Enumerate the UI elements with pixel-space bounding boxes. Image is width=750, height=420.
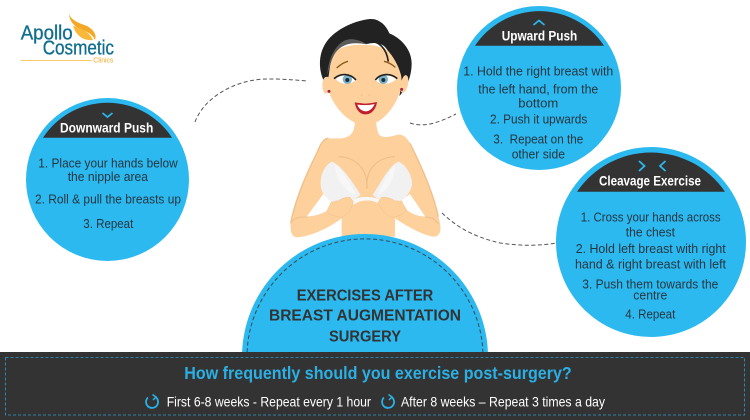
logo: Apollo Cosmetic Clinics: Apollo [21, 22, 73, 44]
logo flame icon [69, 13, 96, 40]
panel: upward push [457, 6, 621, 170]
steps: downward push: 1. Place your hands below [38, 157, 179, 171]
mouth [355, 102, 377, 114]
steps: cleavage exercise: 4. Repeat [625, 308, 676, 322]
header: upward push: Upward Push [502, 28, 577, 44]
steps: upward push: 1. Hold the right breast with [463, 65, 613, 79]
head [320, 19, 412, 125]
steps: downward push: 3. Repeat [83, 217, 134, 231]
steps: upward push: the left hand, from the [478, 83, 598, 97]
header: cleavage exercise [577, 153, 725, 192]
eyes and brows [334, 61, 397, 96]
earrings [327, 88, 403, 93]
steps: cleavage exercise: 2. Hold left breast with right [576, 242, 726, 256]
logo: Apollo Cosmetic Clinics: Cosmetic [43, 37, 114, 59]
footer bar [0, 352, 750, 420]
steps: downward push [35, 157, 181, 231]
icon: chevron down [102, 113, 112, 117]
panel: downward push [26, 98, 189, 261]
steps: upward push: 2. Push it upwards [490, 113, 587, 127]
header: upward push [475, 11, 604, 46]
steps: cleavage exercise: centre [633, 289, 667, 303]
steps: upward push: 3. Repeat on the [493, 133, 583, 147]
body [291, 117, 441, 237]
footer question: How frequently should you exercise post-surgery? [184, 363, 572, 383]
hair [320, 19, 412, 96]
icon: repeat arrow 2 [382, 394, 394, 408]
ears [322, 74, 410, 94]
steps: cleavage exercise [575, 211, 727, 322]
header: cleavage exercise: Cleavage Exercise [599, 174, 701, 189]
steps: upward push: bottom [518, 97, 558, 111]
panel: main title semicircle [242, 234, 488, 352]
panel: cleavage exercise [556, 147, 746, 337]
title: BREAST AUGMENTATION [269, 308, 461, 325]
dashed connector: upward push [410, 114, 456, 125]
title: SURGERY [329, 329, 401, 346]
dashed connector: downward push [195, 79, 307, 122]
steps: downward push: the nipple area [68, 170, 148, 184]
steps: cleavage exercise: hand & right breast with left [575, 258, 727, 272]
frequency: after 8 weeks: After 8 weeks – Repeat 3 times a day [401, 394, 605, 410]
steps: cleavage exercise: 3. Push them towards the [582, 278, 718, 292]
woman illustration [291, 19, 441, 237]
icon: chevron up [534, 20, 544, 25]
steps: downward push: 2. Roll & pull the breasts up [35, 193, 181, 207]
icon: chevrons inward [639, 161, 666, 171]
logo: Apollo Cosmetic Clinics: Clinics [93, 58, 114, 64]
dashed connector: cleavage exercise [442, 213, 556, 245]
title: EXERCISES AFTER [297, 288, 434, 305]
title [269, 288, 461, 346]
steps: upward push: other side [512, 147, 565, 161]
header: downward push [43, 103, 172, 138]
steps: cleavage exercise: 1. Cross your hands across [581, 211, 721, 225]
steps: upward push [463, 65, 613, 161]
header: downward push: Downward Push [60, 120, 153, 136]
steps: cleavage exercise: the chest [626, 226, 676, 240]
icon: repeat arrow 1 [146, 394, 158, 408]
frequency: first 6-8 weeks: First 6-8 weeks - Repeat every 1 hour [167, 394, 371, 410]
logo: Apollo Cosmetic Clinics [21, 13, 114, 64]
